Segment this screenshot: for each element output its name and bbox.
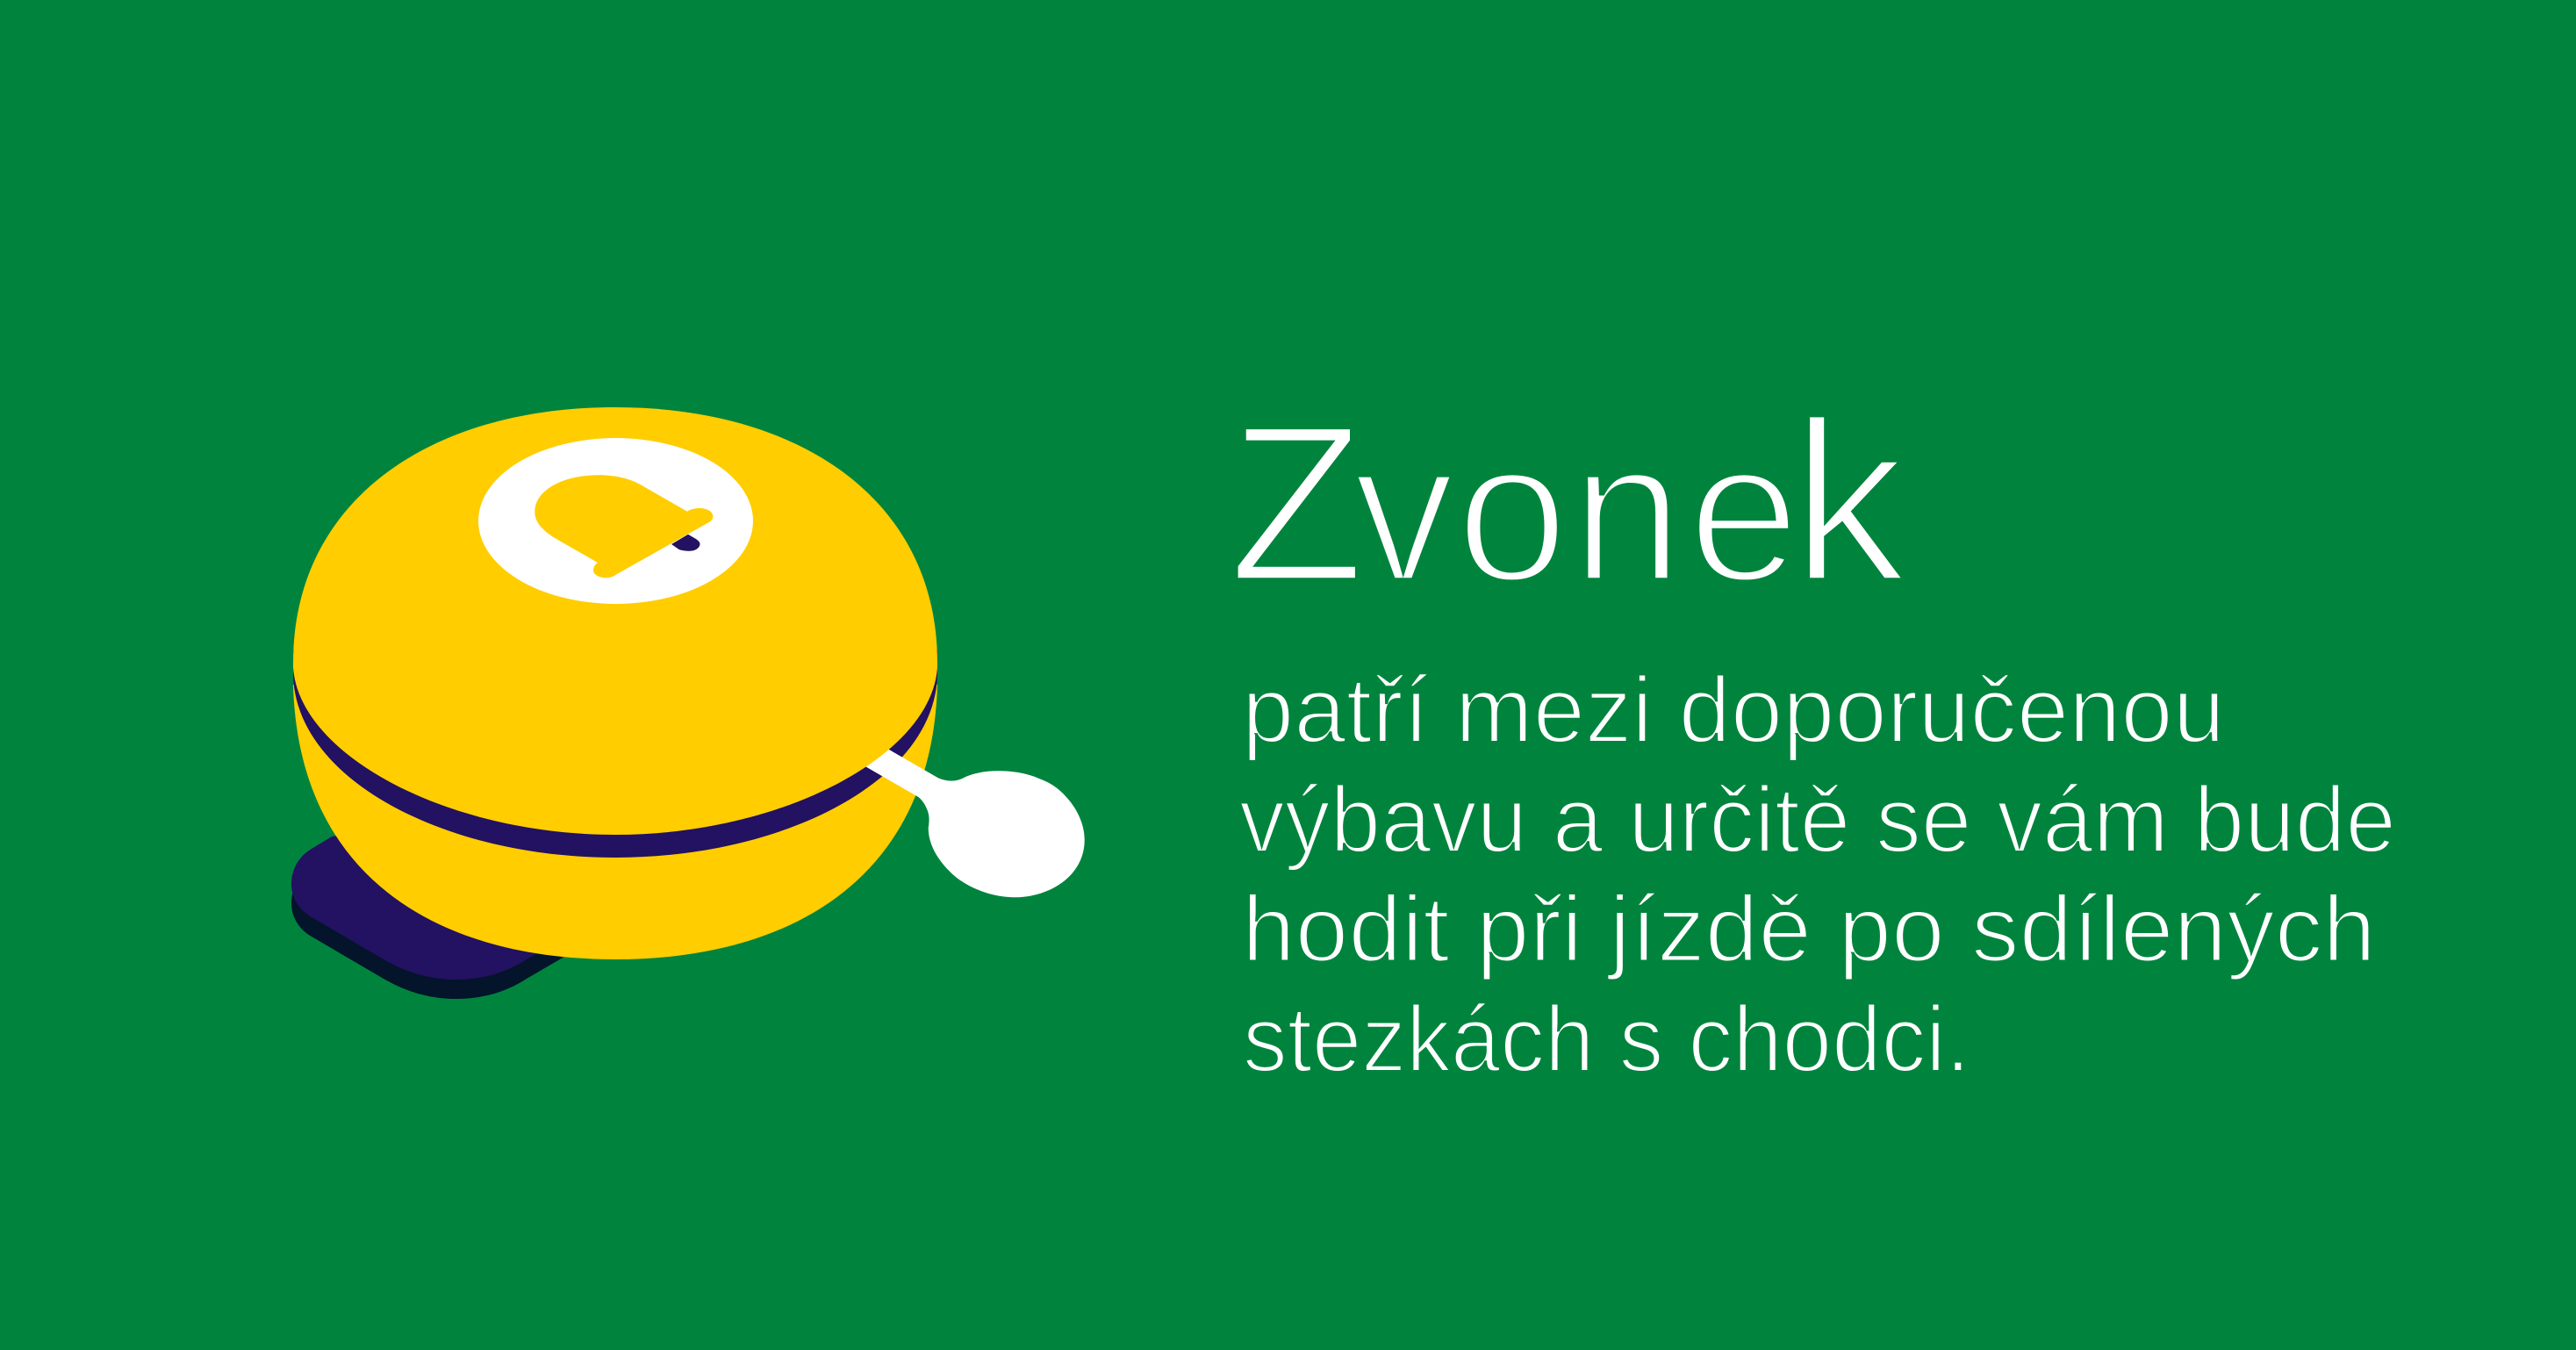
- bell lower body: [293, 685, 937, 959]
- line 4: stezkách s chodci.: [1243, 986, 1970, 1091]
- line 3: hodit při jízdě po sdílených: [1242, 876, 2376, 981]
- heading: o: [1456, 399, 1568, 624]
- white dome badge: [478, 438, 753, 604]
- text block: description: [1239, 657, 2396, 1091]
- icon: bicycle bell: [291, 407, 1085, 999]
- heading: e: [1688, 399, 1800, 624]
- purple band: [293, 650, 937, 858]
- line 1: patří mezi doporučenou: [1242, 657, 2225, 762]
- line 2: výbavu a určitě se vám bude: [1239, 766, 2396, 872]
- bell top dome: [293, 407, 937, 835]
- badge bell clapper: [671, 535, 700, 551]
- heading: v: [1353, 399, 1454, 624]
- badge bell glyph: [535, 475, 713, 578]
- lever with thumb paddle: [842, 736, 1085, 897]
- bell mount: [291, 825, 579, 980]
- heading: n: [1571, 399, 1683, 624]
- heading: Z: [1228, 378, 1365, 629]
- heading: k: [1791, 373, 1910, 630]
- bell mount shadow: [291, 843, 579, 999]
